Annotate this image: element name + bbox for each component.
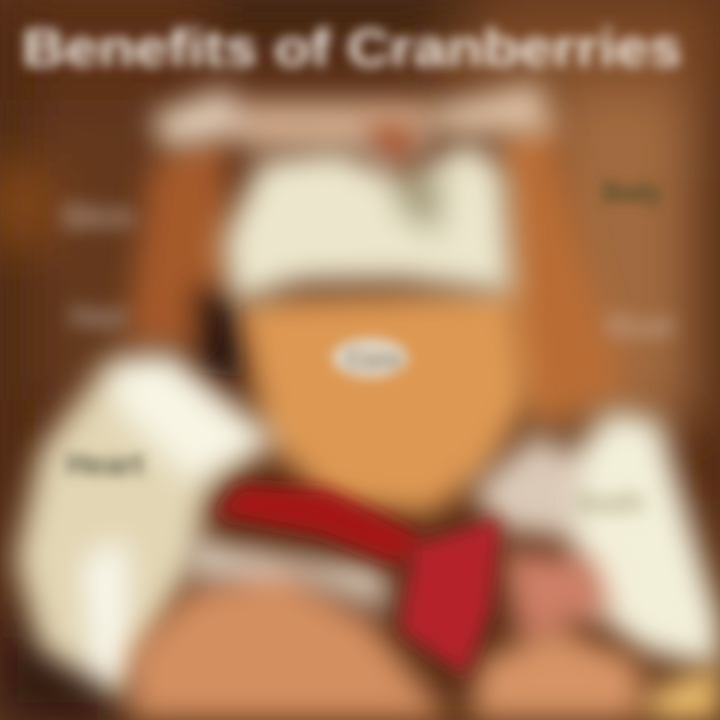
title: Benefits of Cranberries — [22, 19, 682, 78]
lower body — [130, 540, 720, 720]
label: lower left on towel: Heart — [66, 446, 144, 482]
figure: torso — [235, 290, 530, 515]
label: middle left: Hair — [70, 298, 130, 336]
label: center — [332, 338, 408, 378]
label: upper left: Skin — [60, 198, 135, 236]
label: center: Core — [346, 344, 401, 374]
label: lower right on towel: Health — [575, 487, 645, 518]
towel: right white — [470, 410, 720, 670]
garment: white top — [222, 125, 515, 305]
shoulder highlights — [150, 80, 555, 150]
towel: left white — [15, 352, 280, 700]
figure: arms and shoulders — [125, 120, 625, 430]
label: upper right: Body — [603, 176, 661, 209]
red ribbon — [215, 485, 500, 675]
label: middle right: Gut — [605, 310, 673, 343]
